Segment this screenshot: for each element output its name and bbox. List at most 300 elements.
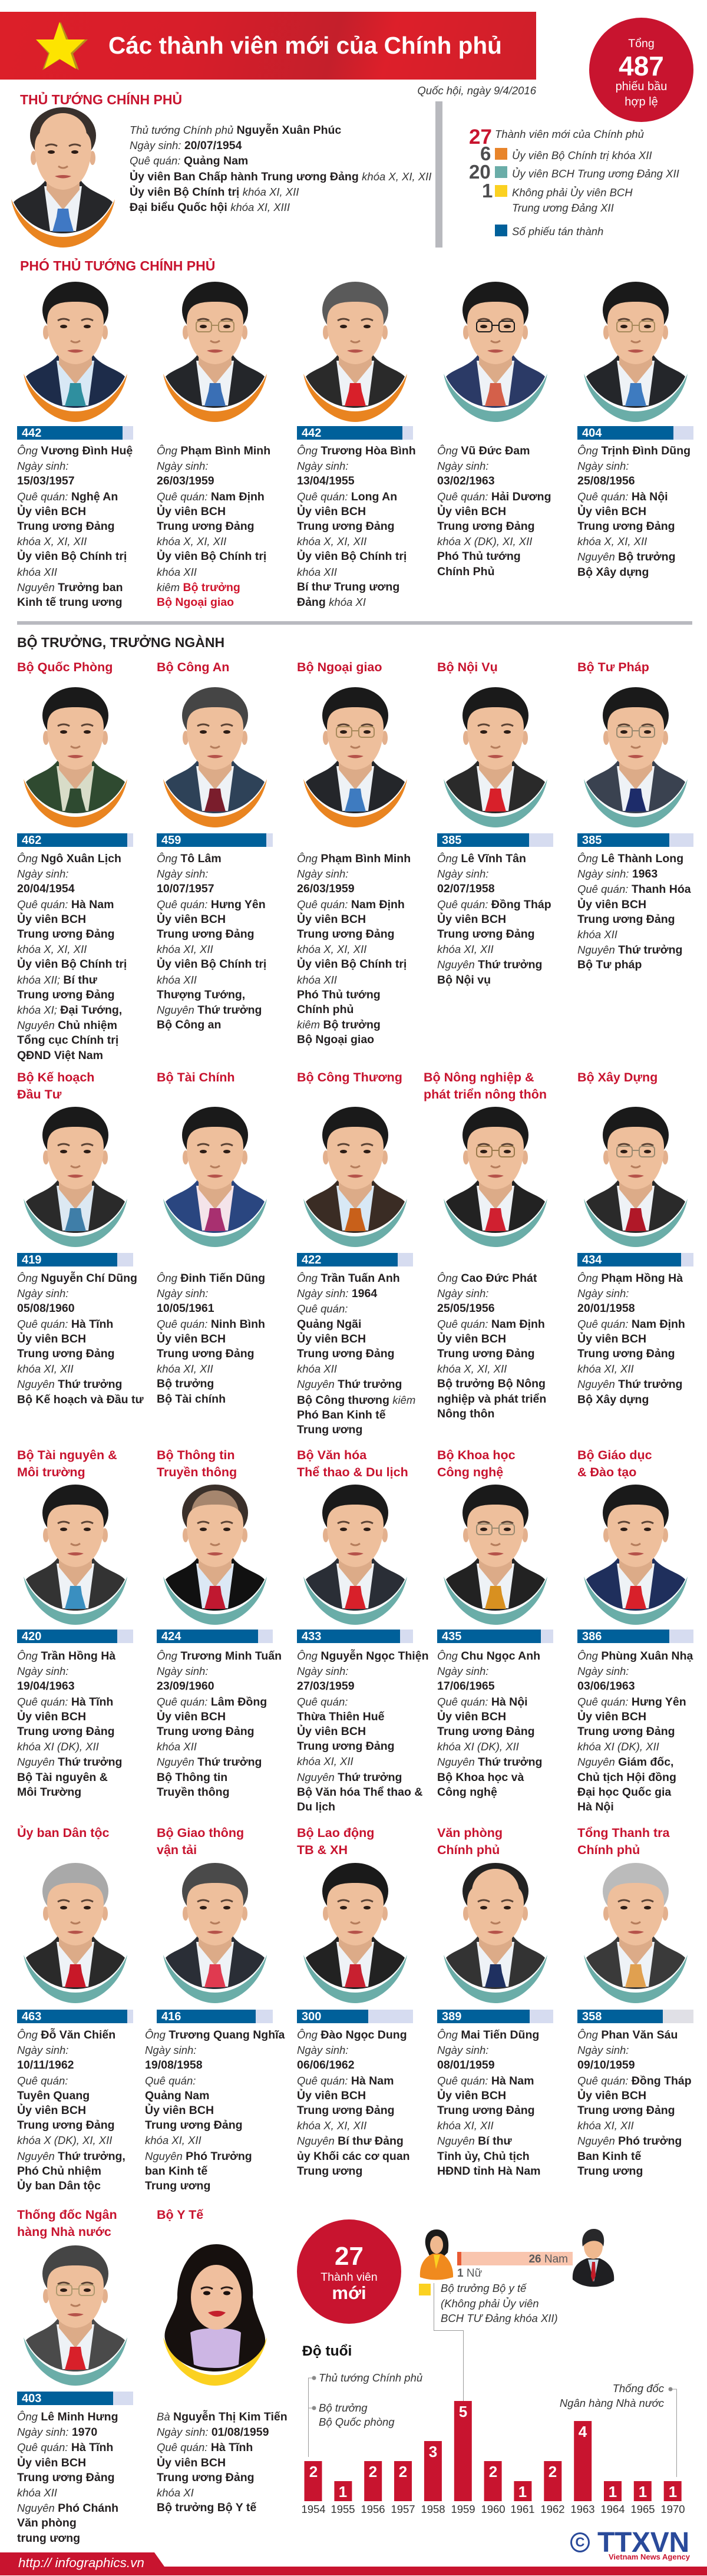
bio: khóa XI, XII: [437, 943, 494, 955]
bio: Ngày sinh: 1964: [297, 1287, 377, 1300]
bio: khóa X, XI, XII: [297, 943, 366, 955]
bio: Trung ương Đảng: [17, 1725, 115, 1738]
bio: [437, 852, 551, 987]
bar values: 2: [489, 2463, 497, 2481]
bio: khóa XII: [157, 566, 197, 578]
bio: khóa XI, XII: [297, 1755, 353, 1767]
portrait: [444, 1483, 547, 1625]
bio: Ủy viên BCH: [157, 2456, 226, 2469]
bio: Ngày sinh:: [437, 868, 488, 880]
icon: man: [573, 2229, 614, 2287]
bio: Ngày sinh:: [17, 460, 68, 472]
bio: Phó Ban Kinh tế: [297, 1409, 386, 1421]
bio: 02/07/1958: [437, 882, 495, 895]
bio: Ông Vũ Đức Đam: [437, 444, 530, 457]
icon: yellow star: [36, 22, 88, 70]
panel: Tổng Thanh tra Chính phủ: [577, 1825, 704, 2191]
bio: 15/03/1957: [17, 474, 75, 487]
bio: 03/02/1963: [437, 474, 495, 487]
bio: Quê quán: Long An: [297, 490, 397, 503]
icon: copyright: C: [576, 2535, 584, 2549]
bar values: [309, 2403, 677, 2501]
bio: Ủy viên BCH: [17, 1710, 86, 1723]
bio: Ông Lê Thành Long: [577, 852, 683, 865]
bio: Ông Đào Ngọc Dung: [297, 2029, 407, 2041]
bio: Ông Chu Ngọc Anh: [437, 1650, 540, 1663]
callout: total ballots: 487: [619, 51, 664, 81]
title banner: [0, 12, 536, 80]
bio: Ủy viên BCH: [157, 505, 226, 518]
portrait: [444, 282, 547, 422]
connector: note to 1959 bar: [430, 2281, 465, 2402]
heading: [17, 1447, 117, 1481]
bio: khóa X, XI, XII: [297, 2119, 366, 2132]
heading: Bộ Giao thông: [157, 1826, 244, 1840]
bio: Quê quán:: [145, 2074, 196, 2087]
bio: Ông Trần Tuấn Anh: [297, 1272, 400, 1285]
bio: Nguyên Thứ trưởng: [577, 944, 682, 956]
bio: 10/07/1957: [157, 882, 214, 895]
bio: Ông Nguyễn Chí Dũng: [17, 1272, 137, 1285]
bio: khóa XII: [17, 2486, 57, 2499]
panel: Bộ Tài Chính: [157, 1070, 267, 1406]
heading: Ủy ban Dân tộc: [17, 1826, 110, 1840]
bio: Phó Thủ tướng: [437, 550, 521, 563]
legend divider: [435, 101, 442, 248]
bio: [17, 2027, 125, 2194]
vote bar: 424: [161, 1630, 181, 1643]
annotations: Thống đốc: [613, 2382, 665, 2394]
bio: Ngày sinh: 1963: [577, 868, 658, 880]
bio: Ngày sinh:: [157, 868, 208, 880]
year labels: 1965: [630, 2503, 655, 2515]
bio: Ông Cao Đức Phát: [437, 1272, 537, 1285]
bio: Ngày sinh: 1970: [17, 2426, 97, 2439]
bio: [577, 2027, 692, 2179]
bio: Ngày sinh:: [157, 460, 208, 472]
vote bar: 462: [22, 834, 41, 847]
vote bar: 389: [442, 2010, 461, 2023]
heading: [577, 1825, 669, 1859]
heading: deputy prime ministers: PHÓ THỦ TƯỚNG CHÍNH PHỦ: [20, 258, 215, 273]
vote bar: [577, 1630, 693, 1643]
bio: 06/06/1962: [297, 2059, 355, 2072]
bio: Ông Trương Minh Tuấn: [157, 1650, 282, 1663]
heading: Thể thao & Du lịch: [297, 1465, 408, 1479]
bio: Tỉnh ủy, Chủ tịch: [437, 2150, 530, 2163]
bio: Công nghệ: [437, 1786, 497, 1799]
bio: Trung ương: [297, 2165, 362, 2178]
legend item: 27: 27: [469, 126, 492, 149]
bio: khóa XI, XII: [157, 1363, 213, 1375]
bio: 26/03/1959: [297, 882, 355, 895]
year labels: 1954: [301, 2503, 326, 2515]
bio: Chủ tịch Hội đồng: [577, 1771, 676, 1784]
bio: Quê quán: Nam Định: [297, 898, 405, 911]
bio: Nguyên Bí thư Đảng: [297, 2135, 404, 2148]
bio: Ngày sinh:: [17, 868, 68, 880]
bio: Trung ương: [145, 2179, 210, 2192]
bio: Bộ Nội vụ: [437, 974, 491, 987]
vote bar: 419: [22, 1254, 41, 1266]
legend item: 20: 20: [469, 161, 491, 183]
bio: Trung ương Đảng: [17, 988, 115, 1001]
legend: Trung ương Đảng XII: [512, 202, 614, 214]
portrait: [24, 687, 127, 827]
bio: Nguyên Trưởng ban: [17, 581, 123, 594]
heading: Bộ Ngoại giao: [297, 660, 382, 674]
logo: TTXVN: [569, 2531, 692, 2564]
bio: Trung ương Đảng: [17, 1347, 115, 1360]
heading: [297, 1447, 408, 1481]
vote bar: 385: [442, 834, 461, 847]
wordmark: TTXVN: [597, 2527, 689, 2558]
portrait: [444, 687, 547, 827]
bio: Bộ Tài chính: [157, 1393, 226, 1406]
bio: Ngày sinh:: [437, 460, 488, 472]
panel: Bộ Quốc Phòng: [17, 660, 133, 1062]
bio: HĐND tỉnh Hà Nam: [437, 2165, 541, 2178]
chart: birth year distribution: [297, 2366, 686, 2522]
bio: [437, 2027, 541, 2179]
panel: Bộ Văn hóa Thể thao & Du lịch: [297, 1447, 424, 1797]
callout: 27 new members: Thành viên: [321, 2271, 378, 2284]
bar: male vs female: 1 Nữ: [457, 2267, 483, 2280]
bio: 19/04/1963: [17, 1680, 75, 1693]
bio: Nguyên Thứ trưởng: [437, 958, 542, 971]
bio: [437, 1648, 542, 1800]
bio: Trung ương Đảng: [297, 2104, 395, 2117]
bio: Ngày sinh:: [157, 1665, 208, 1677]
bio: [297, 2027, 410, 2179]
bio: Ủy viên BCH: [437, 505, 506, 518]
bio: Ủy viên BCH: [157, 1332, 226, 1345]
bio: khóa X (DK), XI, XII: [17, 2134, 112, 2146]
heading: phát triển nông thôn: [424, 1087, 547, 1101]
bio: Quê quán:: [297, 1696, 348, 1708]
portrait: [584, 1862, 688, 2003]
bio: Phó Chủ nhiệm: [17, 2165, 101, 2178]
bio: 03/06/1963: [577, 1680, 635, 1693]
portrait: [303, 282, 407, 422]
bio: Ủy viên BCH: [17, 913, 86, 926]
bio: Nguyên Thứ trưởng: [577, 1378, 682, 1391]
bio: Ủy ban Dân tộc: [17, 2179, 101, 2192]
bio: Ủy viên BCH: [297, 2089, 366, 2102]
vote bar: [577, 426, 693, 440]
bio: Ủy viên BCH: [157, 913, 226, 926]
panel: Bộ Nội Vụ: [437, 660, 553, 987]
callout: total ballots: phiếu bầu: [616, 80, 667, 93]
bio: khóa XII: [297, 974, 337, 986]
icon: copyright: [570, 2532, 590, 2552]
bio: Trung ương Đảng: [145, 2119, 243, 2132]
heading: Văn phòng: [437, 1826, 503, 1840]
bio: Môi Trường: [17, 1786, 81, 1799]
bio: 27/03/1959: [297, 1680, 355, 1693]
vote bar: [17, 1253, 133, 1266]
bio: Ngày sinh:: [577, 2044, 629, 2056]
vote bar: [577, 2010, 693, 2023]
heading: age chart: Độ tuổi: [302, 2343, 352, 2359]
heading: Bộ Khoa học: [437, 1448, 516, 1462]
legend: Ủy viên BCH Trung ương Đảng XII: [512, 167, 679, 180]
bio: [17, 2409, 118, 2546]
bio: Bộ trưởng Bộ Nông: [437, 1377, 546, 1390]
annotations: Bộ trưởng: [319, 2402, 368, 2414]
bio: Trung ương Đảng: [437, 928, 535, 941]
bio: [577, 1271, 685, 1407]
bio: [297, 1271, 415, 1437]
bio: 20/01/1958: [577, 1302, 635, 1315]
bio: Nguyên Giám đốc,: [577, 1756, 673, 1769]
bio: Ban Kinh tế: [577, 2150, 641, 2163]
heading: Bộ Quốc Phòng: [17, 660, 113, 674]
prime minister bio: Ngày sinh: 20/07/1954: [130, 139, 242, 152]
bio: Phó Thủ tướng: [297, 988, 381, 1001]
bio: Trung ương Đảng: [17, 2119, 115, 2132]
bio: Kinh tế trung ương: [17, 596, 123, 609]
heading: [297, 1825, 374, 1859]
bio: Quê quán:: [17, 2074, 68, 2087]
bio: Bộ Tài nguyên &: [17, 1771, 108, 1784]
prime minister bio: Ủy viên Ban Chấp hành Trung ương Đảng khóa X, XI, XII: [130, 170, 431, 183]
bio: Bộ Khoa học và: [437, 1771, 524, 1784]
bio: Ủy viên BCH: [437, 913, 506, 926]
panel: Bộ Tài nguyên & Môi trường: [17, 1447, 144, 1797]
bio: Ông Đinh Tiến Dũng: [157, 1272, 265, 1285]
vote bar: 433: [302, 1630, 321, 1643]
callout: 27 new members: 27: [335, 2242, 364, 2271]
panel: Bộ Lao động TB & XH: [297, 1825, 424, 2191]
date line: Quốc hội, ngày 9/4/2016: [417, 84, 536, 97]
annotations: Bộ Quốc phòng: [319, 2416, 395, 2428]
vote bar: [17, 833, 133, 847]
vote bar: 463: [22, 2010, 41, 2023]
legend item: 1: 1: [482, 180, 493, 202]
panel: Bộ Kế hoạch Đầu Tư: [17, 1070, 144, 1406]
bio: Ủy viên BCH: [437, 1332, 506, 1345]
bio: Bộ Công thương kiêm: [297, 1394, 415, 1407]
prime minister bio: Đại biểu Quốc hội khóa XI, XIII: [130, 201, 290, 214]
vote bar: [437, 833, 553, 847]
bar values: 4: [579, 2423, 587, 2440]
bio: Ủy viên Bộ Chính trị: [297, 550, 407, 563]
bio: Quê quán: Lâm Đồng: [157, 1696, 267, 1708]
bio: khóa XI (DK), XII: [17, 1740, 99, 1753]
bio: Ông Đỗ Văn Chiến: [17, 2029, 115, 2041]
bio: Ủy viên Bộ Chính trị: [17, 958, 127, 971]
bio: khóa XI, XII: [577, 1363, 634, 1375]
bio: Ngày sinh:: [437, 1287, 488, 1299]
bio: Nguyên Thứ trưởng: [437, 1756, 542, 1769]
bio: 26/03/1959: [157, 474, 214, 487]
bio: [157, 444, 270, 609]
gender comparison: [412, 2225, 625, 2290]
bio: Nguyên Bí thư: [437, 2135, 512, 2148]
heading: prime minister: THỦ TƯỚNG CHÍNH PHỦ: [20, 92, 182, 107]
portrait: [24, 1483, 127, 1625]
bio: Ngày sinh:: [297, 460, 348, 472]
portrait: [24, 282, 127, 422]
portrait: [444, 1106, 547, 1247]
section divider: [17, 621, 692, 625]
legend item: votes: [495, 225, 507, 236]
bio: 13/04/1955: [297, 474, 355, 487]
bio: [17, 1648, 122, 1800]
panel: Vương Đình Huệ: [17, 282, 133, 609]
vote bar: [297, 2010, 413, 2023]
annotations: Ngân hàng Nhà nước: [560, 2397, 665, 2409]
callout: 27 new members: [297, 2219, 401, 2324]
panel: Trịnh Đình Dũng: [577, 282, 693, 579]
bio: 05/08/1960: [17, 1302, 75, 1315]
vote bar: [17, 2392, 133, 2405]
heading: Bộ Công Thương: [297, 1070, 402, 1084]
portrait: [163, 282, 267, 422]
bio: khóa XII: [157, 1740, 197, 1753]
portrait: [163, 1862, 267, 2003]
bio: Quê quán: Hà Nam: [437, 2074, 534, 2087]
bio: Ngày sinh:: [577, 1665, 629, 1677]
bio: [157, 1648, 282, 1800]
bio: trung ương: [17, 2532, 80, 2545]
bio: Ngày sinh:: [437, 2044, 488, 2056]
vote bar: 386: [582, 1630, 602, 1643]
bio: Nguyên Phó Chánh: [17, 2502, 118, 2515]
heading: Môi trường: [17, 1465, 85, 1479]
bio: Ngày sinh:: [297, 868, 348, 880]
bio: Ủy viên BCH: [577, 1710, 646, 1723]
legend: Không phải Ủy viên BCH: [512, 186, 633, 199]
bio: Ông Vương Đình Huệ: [17, 444, 133, 457]
heading: Bộ Nông nghiệp &: [424, 1070, 534, 1084]
bar values: 1: [669, 2483, 677, 2501]
bio: Ông Tô Lâm: [157, 852, 222, 865]
bar values: 1: [518, 2483, 527, 2501]
panel: Vũ Đức Đam: [437, 282, 551, 578]
heading: Bộ Xây Dựng: [577, 1070, 658, 1084]
bio: Ngày sinh: 01/08/1959: [157, 2426, 269, 2439]
bio: Trung ương Đảng: [437, 1725, 535, 1738]
heading: Chính phủ: [437, 1843, 500, 1857]
panel: Bộ Ngoại giao: [297, 660, 411, 1046]
bio: Ngày sinh:: [17, 1665, 68, 1677]
bio: Bộ Ngoại giao: [297, 1033, 374, 1046]
bio: Ông Lê Vĩnh Tân: [437, 852, 526, 865]
bio: Ủy viên BCH: [577, 505, 646, 518]
bar: male vs female: [457, 2252, 573, 2280]
bio: Quê quán: Hà Tĩnh: [17, 1318, 113, 1331]
bio: Quê quán: Hà Tĩnh: [157, 2441, 253, 2454]
bio: Quê quán: Nam Định: [157, 490, 265, 503]
bio: 17/06/1965: [437, 1680, 495, 1693]
heading: [157, 1825, 244, 1859]
bio: khóa XII; Bí thư: [17, 974, 97, 987]
bio: Ngày sinh:: [157, 1287, 208, 1299]
portrait: [444, 1862, 547, 2003]
bio: khóa XII: [297, 1363, 337, 1375]
vote bar: 404: [582, 427, 602, 440]
bio: Ngày sinh:: [17, 2044, 68, 2056]
bio: Trung ương: [577, 2165, 643, 2178]
bio: Ủy viên BCH: [577, 1332, 646, 1345]
heading: Đầu Tư: [17, 1087, 61, 1101]
bio: Ngày sinh:: [297, 1665, 348, 1677]
bio: Trung ương Đảng: [437, 2104, 535, 2117]
bio: khóa XII: [297, 566, 337, 578]
bio: Văn phòng: [17, 2516, 77, 2529]
bio: Quê quán: Nghệ An: [17, 490, 118, 503]
bio: khóa XI, XII: [17, 1363, 74, 1375]
vote bar: [297, 1630, 413, 1643]
bio: Trung ương Đảng: [437, 1347, 535, 1360]
bio: khóa X, XI, XII: [17, 535, 87, 547]
bio: Trung ương Đảng: [17, 928, 115, 941]
bio: Ngày sinh:: [145, 2044, 196, 2056]
bio: Nguyên Thứ trưởng: [17, 1756, 122, 1769]
bio: Trung ương Đảng: [17, 520, 115, 533]
bar values: 2: [549, 2463, 557, 2481]
bio: Quê quán: Hưng Yên: [157, 898, 266, 911]
heading: Bộ Giáo dục: [577, 1448, 652, 1462]
panel: Bộ Nông nghiệp & phát triển nông thôn: [437, 1069, 564, 1434]
heading: [157, 1447, 237, 1481]
bio: Quê quán:: [297, 1302, 348, 1315]
heading: [437, 1447, 516, 1481]
bio: Ông Trương Quang Nghĩa: [145, 2029, 285, 2041]
heading: Bộ Tài nguyên &: [17, 1448, 117, 1462]
bio: Nguyên Thứ trưởng: [157, 1004, 262, 1017]
bio: khóa XI (DK), XII: [577, 1740, 659, 1753]
vote bar: 434: [582, 1254, 602, 1266]
bio: Trung ương Đảng: [577, 1347, 675, 1360]
bio: khóa XI, XII: [145, 2134, 201, 2146]
bio: Trung ương Đảng: [157, 520, 255, 533]
note: health minister: (Không phải Ủy viên: [441, 2297, 539, 2309]
note: health minister: BCH TƯ Đảng khóa XII): [441, 2312, 558, 2324]
bio: [157, 1271, 265, 1407]
bio: Ủy viên Bộ Chính trị: [17, 550, 127, 563]
prime minister bio: [130, 124, 431, 214]
legend item: 6: 6: [480, 143, 491, 164]
portrait: [163, 1107, 267, 1247]
portrait: [24, 1107, 127, 1247]
bio: Quê quán: Hà Tĩnh: [17, 1696, 113, 1708]
note marker: [419, 2284, 431, 2295]
bio: Truyền thông: [157, 1786, 230, 1799]
bio: Ủy viên BCH: [157, 1710, 226, 1723]
vote bar: 403: [22, 2392, 41, 2405]
vote bar: [157, 1630, 273, 1643]
vote bar: [577, 833, 693, 847]
bio: Trung ương Đảng: [577, 2104, 675, 2117]
bio: Bộ Xây dựng: [577, 1393, 649, 1406]
bio: Quảng Nam: [145, 2089, 209, 2102]
portrait: [584, 282, 688, 422]
callout: total ballots: hợp lệ: [625, 95, 658, 108]
heading: Bộ Lao động: [297, 1826, 374, 1840]
vote bar: 416: [161, 2010, 181, 2023]
bio: Bộ Thông tin: [157, 1771, 227, 1784]
year labels: 1962: [540, 2503, 565, 2515]
year labels: 1961: [510, 2503, 535, 2515]
annotations: [309, 2371, 676, 2477]
panel: Thống đốc Ngân hàng Nhà nước: [17, 2206, 144, 2543]
bio: Trung ương Đảng: [157, 2471, 255, 2484]
portrait: [303, 1483, 407, 1625]
bio: [17, 852, 127, 1062]
